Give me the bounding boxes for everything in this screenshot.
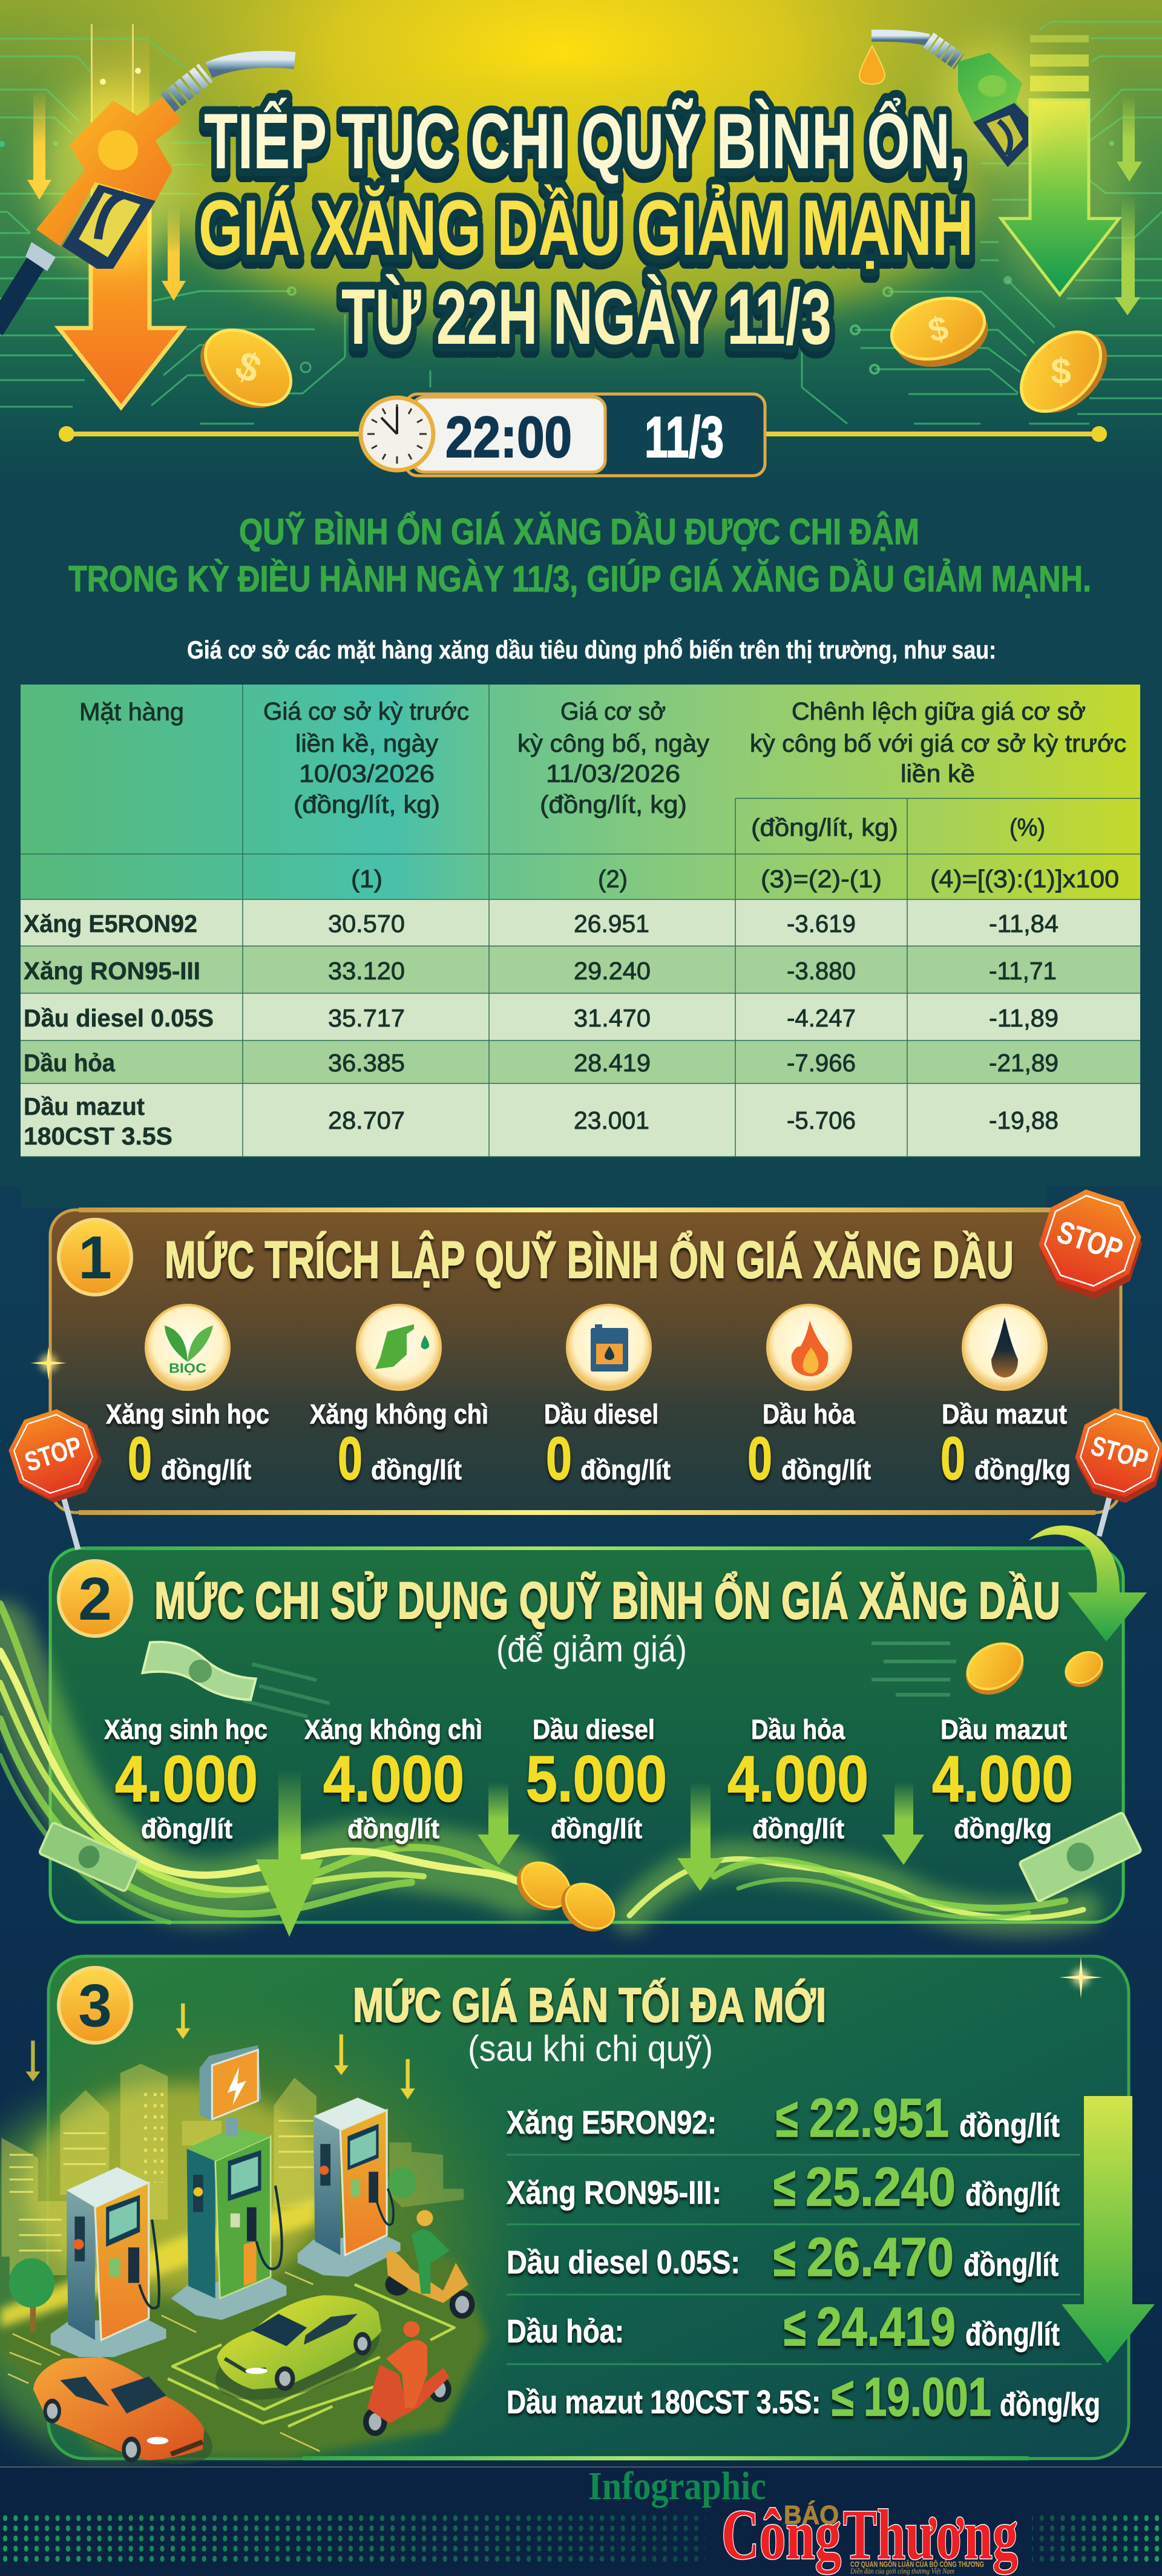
badge 3: 3	[78, 1972, 112, 2040]
logo: Báo Công Thương: CƠ QUAN NGÔN LUẬN CỦA BỘ CÔNG THƯƠNG	[850, 2560, 984, 2569]
timeline line with dots	[59, 426, 1107, 442]
table row: Dầu mazut 180CST 3.5S: 180CST 3.5S	[24, 1122, 172, 1150]
fund values: đồng/lít	[781, 1454, 871, 1485]
fund values: đồng/kg	[974, 1454, 1071, 1485]
icon: stop sign bottom left	[1, 1401, 110, 1549]
heading: fund spending statement: QUỸ BÌNH ỔN GIÁ XĂNG DẦU ĐƯỢC CHI ĐẬM	[239, 511, 919, 552]
fund values: đồng/lít	[161, 1454, 251, 1485]
fund values: 0	[128, 1425, 152, 1493]
table header background	[21, 685, 1140, 899]
table row: Xăng RON95-III	[24, 957, 1057, 985]
dot pattern right	[1032, 2515, 1160, 2561]
table row: Dầu hỏa: -21,89	[989, 1049, 1059, 1077]
price row: Xăng E5RON92: ≤	[776, 2088, 798, 2149]
price row: Dầu hỏa: ≤	[784, 2297, 806, 2358]
table row: Dầu mazut 180CST 3.5S	[24, 1092, 1059, 1150]
table row: Dầu mazut 180CST 3.5S: -5.706	[787, 1106, 856, 1134]
arrow: medium green 2	[677, 1782, 724, 1891]
small arrows	[25, 2003, 415, 2099]
table row: Dầu hỏa: 28.419	[574, 1049, 651, 1077]
fuel labels: Dầu mazut	[942, 1399, 1067, 1430]
price row: Dầu diesel 0.05S: đồng/lít	[963, 2247, 1059, 2283]
skyline	[2, 2064, 464, 2275]
table header labels: 11/03/2026	[546, 760, 680, 787]
logo: Báo Công Thương: Diễn đàn của giới công thương Việt Nam	[850, 2566, 954, 2575]
price row: Dầu mazut 180CST 3.5S: 19.001	[864, 2367, 991, 2428]
table row: Xăng RON95-III: -11,71	[989, 957, 1057, 985]
glow behind title	[182, 79, 980, 333]
table header labels: (2)	[598, 865, 628, 893]
badge 1	[59, 1220, 131, 1295]
horizon glow	[0, 2198, 317, 2328]
circuit lines	[0, 22, 1162, 424]
spend values: 4.000	[727, 1742, 868, 1815]
swirling ribbons	[0, 1604, 1083, 1922]
main title	[199, 97, 973, 361]
price row: Dầu mazut 180CST 3.5S: ≤	[832, 2367, 854, 2428]
table row: Dầu diesel 0.05S: 31.470	[574, 1004, 651, 1032]
table header labels: (1)	[351, 865, 382, 893]
icon: stop sign top right: STOP	[1052, 1214, 1127, 1269]
date text: 11/3	[645, 405, 724, 470]
table header labels: Mặt hàng	[79, 698, 184, 726]
units: đồng/lít	[752, 1813, 844, 1844]
glow behind panel 3 illustration	[0, 2094, 266, 2457]
table row: Dầu hỏa: Dầu hỏa	[24, 1049, 116, 1077]
table header labels: Chênh lệch giữa giá cơ sở	[792, 697, 1086, 725]
icon: coin left: $	[229, 342, 268, 392]
scooter: red with orange rider	[363, 2321, 451, 2436]
arrow: small orange middle	[162, 206, 186, 301]
price row: Xăng RON95-III: 25.240	[806, 2157, 956, 2218]
fuel pump: right	[298, 2098, 401, 2277]
fuel labels: Dầu diesel	[533, 1714, 655, 1745]
units: đồng/lít	[141, 1813, 232, 1844]
table header labels: (đồng/lít, kg)	[294, 790, 440, 818]
fuel labels	[104, 1714, 1067, 1745]
table row: Xăng E5RON92: -3.619	[787, 910, 856, 938]
table rows background	[21, 899, 1140, 1157]
fuel labels	[106, 1399, 1067, 1430]
fuel labels: Dầu mazut	[940, 1714, 1067, 1745]
price row: Dầu mazut 180CST 3.5S	[507, 2367, 1100, 2428]
price row: Dầu hỏa	[507, 2297, 1060, 2358]
fuel pump: center green	[171, 2118, 286, 2320]
table header labels	[79, 697, 1126, 893]
table row: Dầu diesel 0.05S: Dầu diesel 0.05S	[24, 1004, 214, 1032]
main title: TỪ 22H NGÀY 11/3	[341, 272, 832, 361]
table row: Dầu mazut 180CST 3.5S: 28.707	[328, 1106, 405, 1134]
logo: Báo Công Thương: BÁO	[784, 2500, 839, 2530]
sign: lightning	[199, 2045, 261, 2121]
table row: Dầu mazut 180CST 3.5S: 23.001	[574, 1106, 649, 1134]
table row: Dầu diesel 0.05S: 35.717	[328, 1004, 405, 1032]
icon: flying coins	[872, 1634, 1110, 1704]
parking lines	[8, 2272, 455, 2451]
panel 3 subheading: (sau khi chi quỹ)	[468, 2028, 713, 2069]
price row: Xăng E5RON92	[507, 2088, 1060, 2149]
spend values	[115, 1742, 1073, 1815]
sparkle	[30, 1347, 67, 1380]
spend values: 5.000	[526, 1742, 667, 1815]
table row: Dầu diesel 0.05S	[24, 1004, 1059, 1032]
arrow: medium green 1	[478, 1782, 520, 1865]
icon: stop sign bottom left: STOP	[21, 1430, 85, 1477]
units	[141, 1813, 1052, 1844]
city glow	[25, 2084, 329, 2294]
arrow: medium green 3	[882, 1782, 924, 1865]
fuel labels: Xăng không chì	[304, 1714, 482, 1745]
fund values	[128, 1425, 1071, 1493]
table row: Dầu hỏa	[24, 1049, 1059, 1077]
scooter: yellow with green rider	[385, 2210, 474, 2319]
ground	[0, 2210, 487, 2457]
badge 3	[59, 1968, 131, 2043]
fuel labels: Dầu diesel	[544, 1399, 658, 1430]
table row: Xăng RON95-III: 29.240	[574, 957, 651, 985]
gold highlight bottom	[79, 1510, 1095, 1515]
sparkle	[1059, 1956, 1103, 1999]
panel 2: stabilization fund usage	[0, 1525, 1147, 1942]
date pill	[361, 394, 765, 476]
fund values: 0	[940, 1425, 965, 1493]
price row: Xăng E5RON92: Xăng E5RON92:	[507, 2104, 717, 2141]
panel 3: new maximum retail prices	[0, 1956, 1155, 2518]
fuel labels: Dầu hỏa	[751, 1714, 845, 1745]
panel 2 subheading: (để giảm giá)	[496, 1629, 687, 1669]
header banner	[0, 0, 1162, 484]
spend values: 4.000	[932, 1742, 1073, 1815]
icon: orange fuel nozzle	[0, 59, 295, 330]
price row: Dầu diesel 0.05S: ≤	[773, 2227, 796, 2288]
icon: money flying left	[142, 1638, 335, 1721]
price row: Dầu hỏa: Dầu hỏa:	[507, 2313, 624, 2350]
table header labels: (%)	[1009, 813, 1045, 841]
arrow: large green right	[993, 35, 1126, 297]
fund values: đồng/lít	[371, 1454, 462, 1485]
fuel labels: Xăng sinh học	[104, 1714, 268, 1745]
green highlights	[85, 1546, 1089, 1550]
table header labels: (3)=(2)-(1)	[761, 865, 882, 893]
table row: Dầu hỏa: -7.966	[787, 1049, 856, 1077]
badge 2	[59, 1561, 131, 1636]
icon: flame	[767, 1305, 851, 1390]
table header labels: liền kề	[901, 760, 975, 787]
spend values: 4.000	[115, 1742, 258, 1815]
fuel pump: left	[51, 2167, 166, 2357]
icon: bio fuel	[146, 1305, 229, 1390]
price row: Dầu hỏa: 24.419	[816, 2297, 956, 2358]
price row: Dầu mazut 180CST 3.5S: đồng/kg	[1000, 2387, 1100, 2423]
fund values: 0	[546, 1425, 572, 1493]
icon: coin right top	[885, 289, 995, 376]
arrow: big green bottom	[256, 1769, 323, 1937]
units: đồng/lít	[551, 1813, 642, 1844]
table row: Xăng E5RON92: 26.951	[574, 910, 649, 938]
icon: diesel barrel	[567, 1305, 651, 1390]
price row: Xăng E5RON92: 22.951	[809, 2088, 949, 2149]
table row: Xăng E5RON92	[24, 910, 1059, 938]
page background	[0, 1180, 1162, 2576]
logo: Báo Công Thương: Công	[721, 2495, 841, 2574]
panel 1: stabilization fund contribution	[30, 1208, 1121, 1515]
price row: Dầu mazut 180CST 3.5S: Dầu mazut 180CST 3.5S:	[507, 2384, 821, 2420]
table row: Xăng RON95-III: Xăng RON95-III	[24, 957, 200, 985]
logo: Báo Công Thương: Thương	[843, 2495, 1018, 2574]
table row: Xăng RON95-III: -3.880	[787, 957, 856, 985]
table header labels: 10/03/2026	[299, 760, 435, 787]
fuel labels: Dầu hỏa	[763, 1399, 856, 1430]
price row dividers	[507, 2155, 1101, 2364]
gold highlight top	[79, 1208, 1095, 1212]
units: đồng/lít	[347, 1813, 439, 1844]
table row: Dầu mazut 180CST 3.5S: Dầu mazut	[24, 1092, 145, 1120]
icon: coin right bottom	[1006, 314, 1123, 431]
table row: Xăng E5RON92: 30.570	[328, 910, 405, 938]
price row: Xăng RON95-III: ≤	[773, 2157, 796, 2218]
table row: Xăng E5RON92: Xăng E5RON92	[24, 910, 197, 938]
badge 1: 1	[78, 1224, 112, 1292]
heading: fund spending statement	[68, 511, 1091, 599]
icon: coin right top: $	[924, 308, 952, 350]
table header labels: (4)=[(3):(1)]x100	[930, 865, 1119, 893]
tree	[9, 2167, 416, 2332]
fuel labels: Xăng sinh học	[106, 1399, 269, 1430]
icon: green fuel nozzle	[872, 36, 1047, 167]
fund values: đồng/lít	[580, 1454, 671, 1485]
icon: stop sign bottom right	[1067, 1402, 1162, 1536]
panel 3 heading: MỨC GIÁ BÁN TỐI ĐA MỚI	[353, 1978, 826, 2032]
badge 2: 2	[78, 1565, 112, 1633]
fuel labels: Xăng không chì	[310, 1399, 488, 1430]
price row: Xăng RON95-III	[507, 2157, 1060, 2218]
arrow: small green lower right	[1115, 196, 1140, 315]
icon: money bottom right	[1019, 1812, 1141, 1902]
units: đồng/kg	[954, 1813, 1052, 1844]
footer	[0, 2464, 1162, 2576]
icon: coin left	[186, 313, 305, 426]
table header labels: (đồng/lít, kg)	[751, 813, 898, 841]
price row: Xăng E5RON92: đồng/lít	[959, 2108, 1060, 2144]
spend values: 4.000	[323, 1742, 464, 1815]
price row: Xăng RON95-III: Xăng RON95-III:	[507, 2175, 721, 2211]
logo: Báo Công Thương	[721, 2495, 1018, 2575]
time text: 22:00	[445, 405, 572, 470]
subheading: Giá cơ sở các mặt hàng xăng dầu tiêu dùng phổ biến trên thị trường, như sau:	[187, 636, 996, 664]
price row: Dầu diesel 0.05S: Dầu diesel 0.05S:	[507, 2244, 740, 2281]
table header labels: kỳ công bố với giá cơ sở kỳ trước	[750, 729, 1126, 757]
table row: Xăng E5RON92: -11,84	[989, 910, 1059, 938]
arrow: large orange	[59, 24, 183, 407]
table row: Dầu diesel 0.05S: -4.247	[787, 1004, 856, 1032]
icon: clock	[361, 398, 433, 470]
footer label: Infographic	[588, 2464, 766, 2508]
icon: coin right bottom: $	[1051, 351, 1071, 392]
arrow: small orange left	[27, 91, 51, 200]
table row: Dầu hỏa: 36.385	[328, 1049, 405, 1077]
fund values: 0	[747, 1425, 772, 1493]
price row: Xăng RON95-III: đồng/lít	[965, 2177, 1060, 2213]
teal table section background	[0, 482, 1162, 1208]
car: orange	[22, 2351, 225, 2483]
icon: coins bottom center	[507, 1852, 623, 1942]
table row: Dầu diesel 0.05S: -11,89	[989, 1004, 1059, 1032]
price row: Dầu hỏa: đồng/lít	[965, 2316, 1060, 2353]
icon: bio fuel: BIỌC	[169, 1361, 206, 1376]
illustration: fuel station	[0, 2003, 487, 2483]
icon: money bottom left	[39, 1822, 139, 1891]
dot pattern left	[0, 2513, 705, 2564]
arrow: large green right	[1062, 2096, 1155, 2363]
table row: Xăng RON95-III: 33.120	[328, 957, 405, 985]
table header labels: (đồng/lít, kg)	[540, 790, 687, 818]
olive wash behind illustration	[48, 2026, 508, 2459]
table header labels: Giá cơ sở	[560, 697, 666, 725]
icon: stop sign top right	[1028, 1181, 1153, 1307]
price row: Dầu diesel 0.05S: 26.470	[807, 2227, 954, 2288]
table header labels: kỳ công bố, ngày	[517, 729, 710, 757]
arrow: small green upper right	[1117, 96, 1142, 182]
fund values: 0	[338, 1425, 363, 1493]
table header labels: liền kề, ngày	[295, 729, 438, 757]
table row: Dầu mazut 180CST 3.5S: -19,88	[989, 1106, 1059, 1134]
price row: Dầu diesel 0.05S	[507, 2227, 1059, 2288]
table header labels: Giá cơ sở kỳ trước	[263, 697, 469, 725]
icon: oil drop	[859, 46, 885, 84]
icon: mazut oil drop	[963, 1305, 1046, 1390]
arrow: curved green top right	[1029, 1525, 1147, 1641]
green highlight	[303, 2456, 1029, 2460]
table: base prices	[21, 685, 1140, 1157]
icon: unleaded nozzle	[357, 1305, 441, 1390]
car: green	[206, 2295, 390, 2417]
